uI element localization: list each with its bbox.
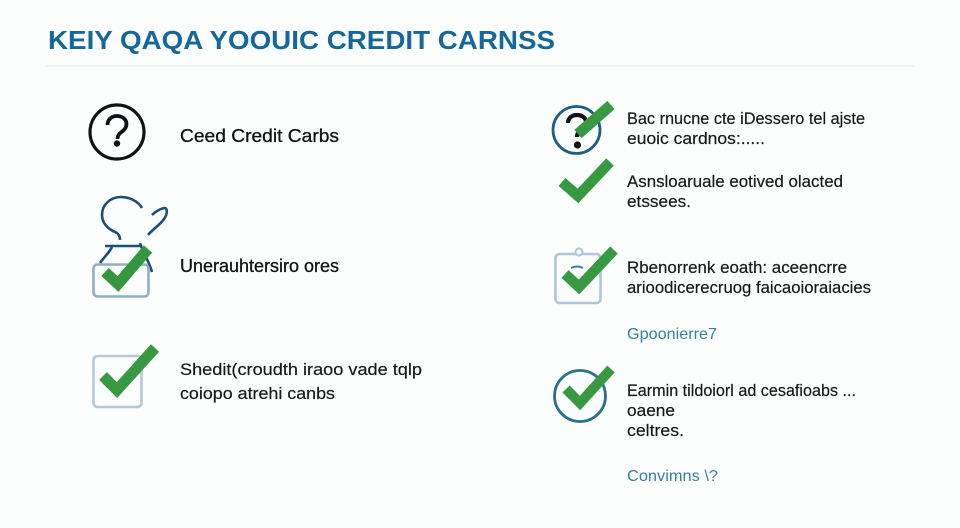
link: right item 4: Convimns \? <box>627 468 718 485</box>
icon: person with checkbox <box>94 197 167 296</box>
right item 4 <box>554 369 856 440</box>
left item 1 <box>90 105 339 159</box>
right item 1 <box>553 105 865 154</box>
text: right item 1: Bac rnucne cte iDessero tel ajste <box>627 109 865 128</box>
icon: question circle with check <box>553 105 611 154</box>
text: right item 1: euoic cardnos:..... <box>627 129 765 148</box>
icon: check mark <box>562 162 610 196</box>
text: right item 3: Rbenorrenk eoath: aceencrre <box>627 258 847 277</box>
text: left item 1: Ceed Credit Carbs <box>180 126 339 146</box>
text: right item 4 <box>627 381 856 440</box>
text: right item 2 <box>627 172 843 211</box>
text: right item 2: Asnsloaruale eotived olacted <box>627 172 843 191</box>
text: right item 3: arioodicerecruog faicaoioraiacies <box>627 278 871 297</box>
text: right item 1 <box>627 109 865 148</box>
text: right item 4: celtres. <box>627 421 684 440</box>
icon: clipboard with check <box>556 248 614 303</box>
right item 3 <box>556 248 871 303</box>
right item 2 <box>562 162 843 211</box>
link: right item 3: Gpoonierre7 <box>627 326 717 343</box>
text: right item 4: Earmin tildoiorl ad cesafioabs ... <box>627 381 856 400</box>
icon: question mark circle <box>90 105 144 159</box>
text: left item 3: Shedit(croudth iraoo vade tqlp <box>180 360 422 379</box>
text: left item 3: coiopo atrehi canbs <box>180 384 335 403</box>
left item 2 <box>94 197 339 296</box>
text: left item 3 <box>180 360 422 403</box>
text: right item 2: etssees. <box>627 192 691 211</box>
title: KEIY QAQA YOOUIC CREDIT CARNSS <box>48 27 555 55</box>
text: left item 2: Unerauhtersiro ores <box>180 256 339 276</box>
icon: checked box <box>94 348 155 407</box>
left item 3 <box>94 348 422 407</box>
icon: checked circle <box>554 369 611 422</box>
text: right item 3 <box>627 258 871 297</box>
text: right item 4: oaene <box>627 401 675 420</box>
